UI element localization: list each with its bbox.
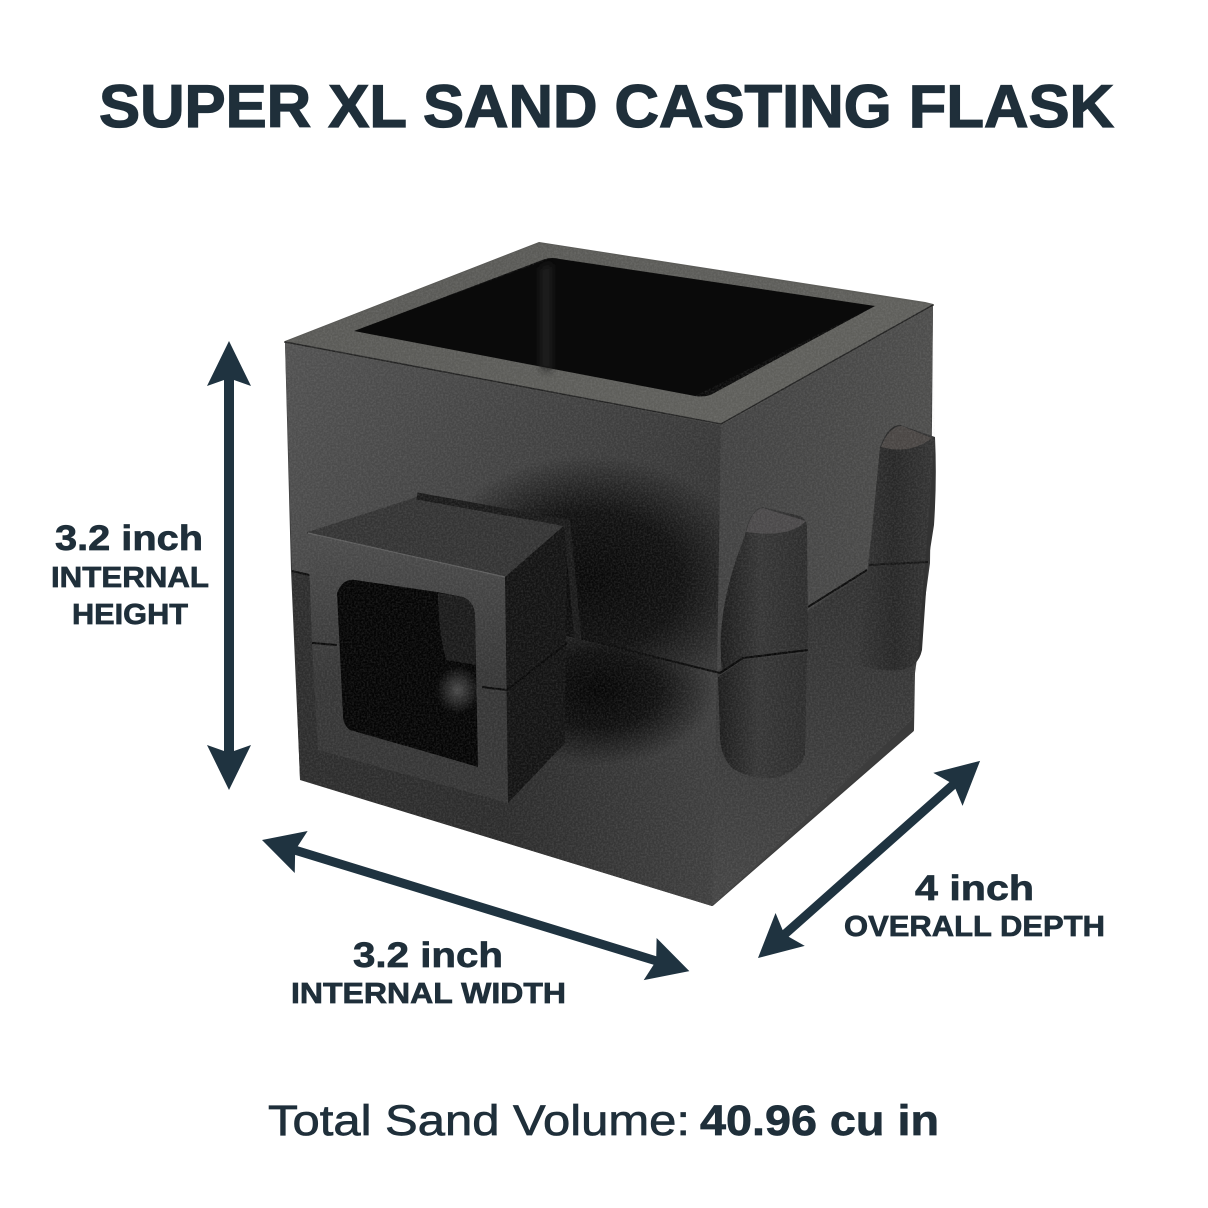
- label: internal height: INTERNAL: [51, 562, 209, 594]
- label: internal width: [291, 936, 566, 1010]
- title: SUPER XL SAND CASTING FLASK: [99, 73, 1114, 140]
- label: internal width: 3.2 inch: [353, 936, 503, 975]
- total sand volume: [268, 1097, 939, 1145]
- label: internal width: INTERNAL WIDTH: [291, 978, 566, 1010]
- label: internal height: 3.2 inch: [55, 519, 203, 558]
- flask body: [285, 245, 933, 906]
- seam line: [292, 570, 867, 673]
- shadow behind boss, lower: [559, 636, 704, 756]
- surface texture: [285, 243, 935, 906]
- total sand volume: Total Sand Volume:: [268, 1097, 690, 1145]
- flask photo: [285, 243, 936, 906]
- near hinge: [718, 507, 808, 778]
- label: overall depth: OVERALL DEPTH: [844, 911, 1105, 943]
- top rim and cavity: [285, 243, 933, 424]
- arrow: overall depth: [743, 744, 995, 974]
- label: internal height: HEIGHT: [72, 599, 188, 631]
- label: overall depth: 4 inch: [915, 869, 1034, 908]
- label: internal height: [51, 519, 209, 631]
- arrow: internal width: [256, 819, 696, 992]
- label: overall depth: [844, 869, 1105, 943]
- opening: [337, 580, 478, 767]
- shadow behind boss, upper: [478, 465, 719, 664]
- total sand volume: 40.96 cu in: [700, 1097, 939, 1145]
- front square boss: [308, 496, 578, 803]
- arrow: internal height: [207, 341, 251, 790]
- far hinge: [860, 425, 936, 670]
